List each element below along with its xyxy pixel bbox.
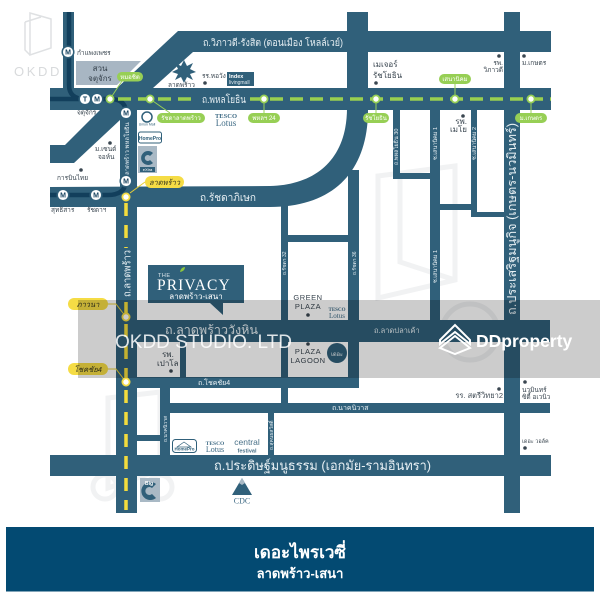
metro stations: M [65,50,71,56]
yellow station pills [68,176,184,386]
road labels: ถ.รัชดา 36 [352,251,358,275]
place labels and dots: เมเจอร์ [373,59,398,69]
place labels and dots: PLAZA [295,347,321,356]
place labels and dots: PLAZA [295,302,321,311]
road labels: ถ.ลาดปลาเค้า [374,326,420,335]
place labels and dots: รพ. [493,60,503,67]
road: Nak Niwat [160,403,550,413]
road labels: ถ.วิภาวดี-รังสิต (ดอนเมือง โหลล์เวย์) [203,36,343,49]
road: Soi Senanikom 2 [471,108,477,217]
place labels and dots: เมโย [450,124,467,134]
metro stations [57,46,132,201]
project callout: The Privacy: ลาดพร้าว-เสนา [169,292,223,301]
place labels and dots: GREEN [293,293,323,302]
yellow station pills: ลาดพร้าว [149,178,181,187]
watermark: OKDD top-left logo [14,13,62,79]
logo: Big C bottom: Big [145,481,153,487]
place labels and dots: รพ. [162,350,174,359]
road: BTS spur north [63,12,74,92]
green pill labels: เสนานิคม [442,76,468,83]
logo: Tesco Lotus Green Plaza: Lotus [329,312,345,320]
watermark: faint logos [93,166,498,499]
park: Chatuchak: สวน [93,64,108,73]
yellow station pills: ภาวนา [77,300,100,309]
metro stations: M [94,96,100,104]
logo: HomePro top [138,132,162,143]
logo: DDproperty [440,325,573,354]
park: Chatuchak [76,61,141,85]
place labels and dots: เดอะ วอล์ค [522,438,549,445]
green pill labels: ม.เกษตร [520,115,543,122]
metro stations: M [123,110,129,118]
logo: Lagoon circle: เดอะ [331,352,343,358]
place labels and dots: ม.เกษตร [522,60,547,67]
title banner: เดอะไพรเวซี่ [254,540,346,562]
logo: HomePro bottom [172,440,196,452]
road: diagonal lower [50,110,120,163]
road labels: ถ.โชคชัย4 [198,378,230,387]
place labels and dots: ลาดพร้าว [168,81,195,89]
road labels: ซ.เสนานิคม 2 [471,127,478,160]
road: Prasert Manukit [504,12,520,513]
road: Lat Phrao Wang Hin [137,320,550,342]
logo: DDproperty: DDproperty [476,331,573,351]
place labels and dots: LAGOON [290,356,326,365]
road: Phahon Yothin [50,88,551,110]
yellow dashed line [124,203,128,510]
road labels: ถ.รัชดาภิเษก [200,192,256,204]
title banner [6,527,594,592]
road labels: ถ.พหลโยธิน [202,93,246,106]
logo: Union Mall: Union Mall [139,122,155,126]
green stations [106,95,535,103]
place labels and dots: การบินไทย [57,174,88,182]
logo: Index Living Mall [227,72,254,86]
place labels and dots: รพ. [455,117,467,126]
road: Soi Phahon 30 [393,108,400,179]
road: diagonal upper [117,31,193,88]
project callout: The Privacy [148,265,244,315]
green pill labels [120,74,543,122]
logo: Tesco Lotus top: Lotus [216,118,237,128]
logo: Central Festival [234,437,260,454]
logo: Big C Extra [138,146,157,173]
place labels and dots: รร.หอวัง [202,72,226,80]
icon: Lat Phrao star logo [172,60,196,83]
road labels: ถ.สุคนธสวัสดิ์ [267,419,275,450]
green pill labels: รัชโยธิน [365,114,387,122]
logo: Lagoon circle [327,343,347,363]
road: Soi Ratchada 36 [348,170,359,388]
yellow station pills: โชคชัย4 [74,365,102,374]
road labels: ถ.รัชดา 32 [282,251,288,275]
logo: Tesco Lotus bottom [206,441,225,454]
road: Soi Senanikom 1 [430,108,440,322]
watermark band [78,300,600,378]
road labels: ถ.ลาดพร้าว [122,250,134,297]
project callout: The Privacy: PRIVACY [157,277,231,294]
metro stations: M [93,192,99,200]
logo: Index Living Mall: Index [229,74,244,80]
road labels: ถ.ลาดพร้าววังหิน [165,323,258,337]
park: Chatuchak: จตุจักร [88,74,113,83]
road: Lat Phrao [120,105,137,195]
place labels and dots: ม.เซนต์ [95,145,116,153]
logo: Central Festival: central [234,437,260,447]
logo: Tesco Lotus Green Plaza [329,308,346,320]
road: Soi Ratchada 32 [281,200,288,412]
road labels: ถ.นาคนิวาส [332,404,369,412]
metro stations: M [60,192,66,200]
road: Ratchadaphisek with curve [50,12,368,207]
road: Vibhavadi [178,31,551,52]
place labels and dots: นวมินทร์ [522,386,547,394]
road labels: ซ.เสนานิคม 1 [432,127,439,160]
logo: Tesco Lotus Green Plaza: TESCO [329,308,346,313]
station connectors [110,81,531,113]
title banner: ลาดพร้าว-เสนา [257,566,343,581]
logo: Union Mall [139,112,155,126]
icon: CDC mountain [232,478,252,506]
road labels: ถ.ประดิษฐ์มนูธรรม (เอกมัย-รามอินทรา) [214,458,431,474]
place labels and dots: วิภาวดี [483,66,503,74]
green pill labels: รัชดาลาดพร้าว [161,115,201,122]
place labels and dots: ซิตี้ อเวนิว [522,392,551,401]
metro stations: T [83,96,88,104]
logo: Big C Extra: eXtra [143,167,153,172]
road network [50,12,551,513]
logo: HomePro bottom: HomePro [174,446,195,452]
place labels and dots: รัชดาฯ [87,206,107,214]
logo: Tesco Lotus bottom: Lotus [206,445,224,454]
green pill labels: พหลฯ 24 [252,115,276,122]
logo: Tesco Lotus bottom: TESCO [206,441,225,447]
road labels: ถ.ประเสริฐมนูกิจ (เกษตร-นวมินทร์) [505,123,520,315]
watermark: OKDD top-left logo: OKDD [14,64,62,79]
road labels: ซ.เสนานิคม 1 [432,250,439,283]
green station pills [117,72,547,123]
logo: Tesco Lotus top [215,113,237,128]
green pill labels: หมอชิต [120,74,140,81]
project callout: The Privacy: THE [158,273,170,279]
metro line [50,12,126,195]
logo: Central Festival: festival [238,448,257,454]
road labels: ถ.พหลโยธิน 30 [392,129,400,165]
road labels [122,36,520,474]
watermark band: OKDD STUDIO. LTD [115,332,292,353]
road labels: ถ.นาคนิวาส [162,416,169,442]
road: Chokchai 4 [137,377,359,388]
place labels and dots [51,49,551,450]
place labels and dots: กำแพงเพชร [77,49,111,57]
green dashed BTS line [118,97,551,101]
place labels and dots: เปาโล [157,358,179,368]
logo: Tesco Lotus top: TESCO [215,113,237,120]
metro stations: M [123,178,129,186]
place labels and dots: จตุจักร [77,108,97,116]
road: side sois [160,388,170,456]
logo: HomePro top: HomePro [139,136,161,142]
place labels and dots: รัชโยธิน [373,70,403,80]
logo: Big C bottom [140,478,160,502]
road labels: ลาดพร้าว พหลโยธิน [123,122,131,175]
place labels and dots: สุทธิสาร [51,206,75,214]
logo: Index Living Mall: livingmall [229,80,250,86]
place labels and dots: จอห์น [98,153,115,161]
icon: CDC mountain: CDC [234,496,250,506]
place labels and dots: รร. สตรีวิทยา2 [455,391,503,400]
road: Pradit Manutham [50,455,551,476]
